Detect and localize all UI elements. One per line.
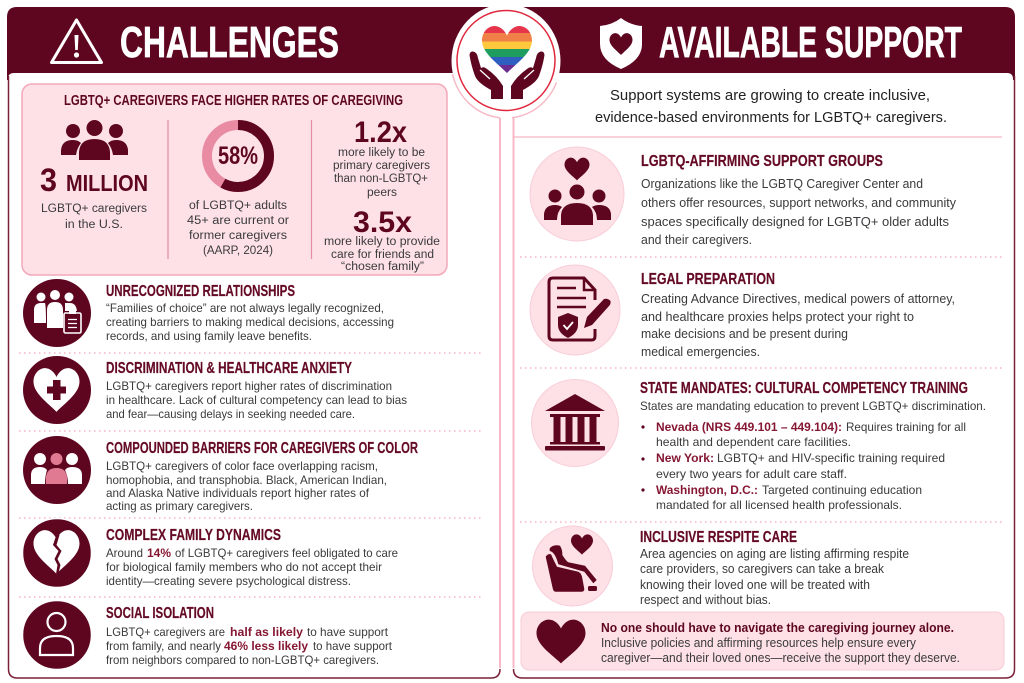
item: unrecognized relationships [23, 279, 394, 347]
stat: 3.5x: care for friends and [331, 249, 434, 261]
body text: half as likely [230, 625, 303, 639]
body text [106, 459, 387, 513]
stat: 58 percent donut [187, 125, 289, 257]
stat: 58 percent donut: (AARP, 2024) [203, 245, 273, 257]
body text [106, 625, 393, 667]
body text: Creating Advance Directives, medical powers of attorney, [641, 292, 955, 306]
stat: 3 million: 3 [40, 162, 57, 198]
body text: from neighbors compared to non-LGBTQ+ caregivers. [106, 653, 379, 667]
bullet: Washington DC: Washington, D.C.: [656, 483, 758, 497]
body text: LGBTQ+ caregivers of color face overlapping racism, [106, 459, 378, 473]
intro text: Support systems are growing to create inclusive, [610, 88, 930, 104]
heading: INCLUSIVE RESPITE CARE [640, 529, 797, 546]
body text: make decisions and be present during [641, 327, 848, 341]
heading: LEGAL PREPARATION [641, 271, 775, 288]
stat: 3 million: LGBTQ+ caregivers [41, 203, 147, 215]
icon: broken heart [22, 518, 92, 588]
heading: UNRECOGNIZED RELATIONSHIPS [106, 283, 295, 300]
icon: family with clipboard [23, 279, 91, 347]
stat: 3.5x [324, 206, 440, 273]
body text: 46% less likely [224, 639, 308, 653]
heading: DISCRIMINATION & HEALTHCARE ANXIETY [106, 360, 352, 377]
body text: homophobia, and transphobia. Black, American Indian, [106, 473, 387, 487]
stat: 58 percent donut: former caregivers [189, 230, 287, 242]
body text: and fear—causing delays in seeking needed care. [106, 407, 355, 421]
icon: warning triangle [52, 20, 102, 62]
item: complex family dynamics [22, 518, 398, 588]
icon: three people [61, 120, 128, 160]
body text: creating barriers to making medical decisions, accessing [106, 315, 394, 329]
body text: Area agencies on aging are listing affirming respite [640, 547, 909, 561]
icon: heart [536, 620, 586, 663]
stat: 3.5x: “chosen family” [341, 261, 424, 273]
title: CHALLENGES [120, 18, 339, 67]
heading: LGBTQ-AFFIRMING SUPPORT GROUPS [641, 153, 883, 170]
body text [106, 379, 407, 421]
body text [641, 292, 955, 359]
body text: acting as primary caregivers. [106, 499, 253, 513]
intro text [595, 88, 947, 126]
header: available support [600, 18, 962, 69]
icon: document with shield and pen [530, 265, 620, 355]
stat: 1.2x: than non-LGBTQ+ [334, 173, 428, 185]
body text: of LGBTQ+ caregivers feel obligated to care [175, 546, 398, 560]
body text: in healthcare. Lack of cultural competency can lead to bias [106, 393, 407, 407]
body text: from family, and nearly [106, 639, 221, 653]
central emblem [452, 4, 560, 118]
stat: 3 million: MILLION [66, 170, 148, 196]
heading: SOCIAL ISOLATION [106, 605, 214, 622]
body text: “Families of choice” are not always legally recognized, [106, 301, 384, 315]
stats box [22, 84, 447, 275]
heading: COMPOUNDED BARRIERS FOR CAREGIVERS OF COLOR [106, 440, 418, 457]
body text [106, 546, 398, 588]
icon: rainbow heart [482, 26, 532, 73]
body text [106, 301, 394, 343]
item: support groups [530, 147, 957, 247]
item: compounded barriers [23, 436, 418, 513]
body text: Around [106, 546, 143, 560]
body text: and Alaska Native individuals report higher rates of [106, 486, 370, 500]
stat: 1.2x [333, 116, 430, 199]
stat: 58 percent donut: of LGBTQ+ adults [189, 200, 287, 212]
body text: to have support [313, 639, 393, 653]
bullet: New York [641, 451, 945, 481]
icon: person resting in armchair with heart [532, 526, 612, 606]
callout text: caregiver—and their loved ones—receive the support they deserve. [601, 651, 960, 665]
callout text [601, 636, 960, 665]
body text [641, 177, 957, 247]
body text: and their caregivers. [641, 233, 752, 247]
icon: government building [532, 380, 618, 466]
bullet: Washington DC [641, 483, 922, 512]
bullet: New York: New York: [656, 451, 714, 465]
bullet: Washington DC: mandated for all licensed health professionals. [656, 498, 902, 512]
header: challenges [52, 18, 339, 67]
panel: available support [513, 73, 1014, 678]
stat: 3.5x: more likely to provide [324, 236, 440, 248]
bullet: Nevada [641, 420, 966, 449]
body text: LGBTQ+ caregivers report higher rates of discrimination [106, 379, 392, 393]
item: social isolation [22, 600, 393, 670]
panel: challenges [8, 73, 500, 678]
icon: shield with heart [600, 18, 642, 69]
body text: others offer resources, support networks, and community [641, 196, 957, 210]
icon: group with heart [530, 147, 624, 241]
stat: 58 percent donut: 45+ are current or [187, 215, 289, 227]
stat: 1.2x: 1.2x [354, 116, 407, 149]
callout heading: No one should have to navigate the caregiving journey alone. [601, 620, 954, 635]
stat: 1.2x: more likely to be [338, 147, 425, 159]
stat: 3.5x: 3.5x [353, 206, 412, 239]
body text: Organizations like the LGBTQ Caregiver Center and [641, 177, 923, 191]
bullet: New York: LGBTQ+ and HIV-specific training required [717, 451, 945, 465]
body text: for biological family members who do not accept their [106, 560, 382, 574]
body text: 14% [147, 546, 171, 560]
stat: 1.2x: peers [367, 187, 397, 199]
item: inclusive respite care [532, 526, 909, 607]
icon: caring hands [470, 51, 544, 99]
stat: 3 million [40, 120, 148, 231]
body text: medical emergencies. [641, 345, 760, 359]
body text: knowing their loved one will be treated with [640, 578, 870, 592]
body text: LGBTQ+ caregivers are [106, 625, 225, 639]
bullet: Washington DC: Targeted continuing education [762, 483, 922, 497]
icon: heart with cross [23, 356, 91, 424]
body text: care providers, so caregivers can take a break [640, 562, 885, 576]
body text: to have support [307, 625, 389, 639]
stat: 3 million: in the U.S. [65, 219, 123, 231]
item: discrimination and healthcare anxiety [23, 356, 407, 424]
bullet: Nevada: Requires training for all [846, 420, 966, 434]
icon: three people of color [23, 436, 91, 504]
callout [521, 612, 1004, 670]
callout text: Inclusive policies and affirming resources help ensure every [601, 636, 917, 650]
icon: single person outline [22, 600, 92, 670]
heading: COMPLEX FAMILY DYNAMICS [106, 527, 281, 544]
body text [640, 547, 909, 607]
body text: records, and using family leave benefits. [106, 329, 312, 343]
stats heading: LGBTQ+ CAREGIVERS FACE HIGHER RATES OF CAREGIVING [64, 93, 403, 109]
body text: and healthcare proxies helps protect your right to [641, 310, 914, 324]
body text: spaces specifically designed for LGBTQ+ older adults [641, 215, 949, 229]
header band [7, 7, 1015, 80]
item: state mandates [532, 380, 986, 512]
stat: 1.2x: primary caregivers [333, 160, 430, 172]
item: legal preparation [530, 265, 955, 359]
body text: identity—creating severe psychological distress. [106, 574, 351, 588]
body text: respect and without bias. [640, 593, 771, 607]
bullet: Nevada: health and dependent care facilities. [656, 435, 851, 449]
bullet: Nevada: Nevada (NRS 449.101 – 449.104): [656, 420, 842, 434]
intro line: States are mandating education to prevent LGBTQ+ discrimination. [640, 399, 986, 413]
bullet: New York: every two years for adult care staff. [656, 467, 847, 481]
stat: 58 percent donut: 58% [218, 142, 258, 170]
intro text: evidence-based environments for LGBTQ+ caregivers. [595, 110, 947, 126]
